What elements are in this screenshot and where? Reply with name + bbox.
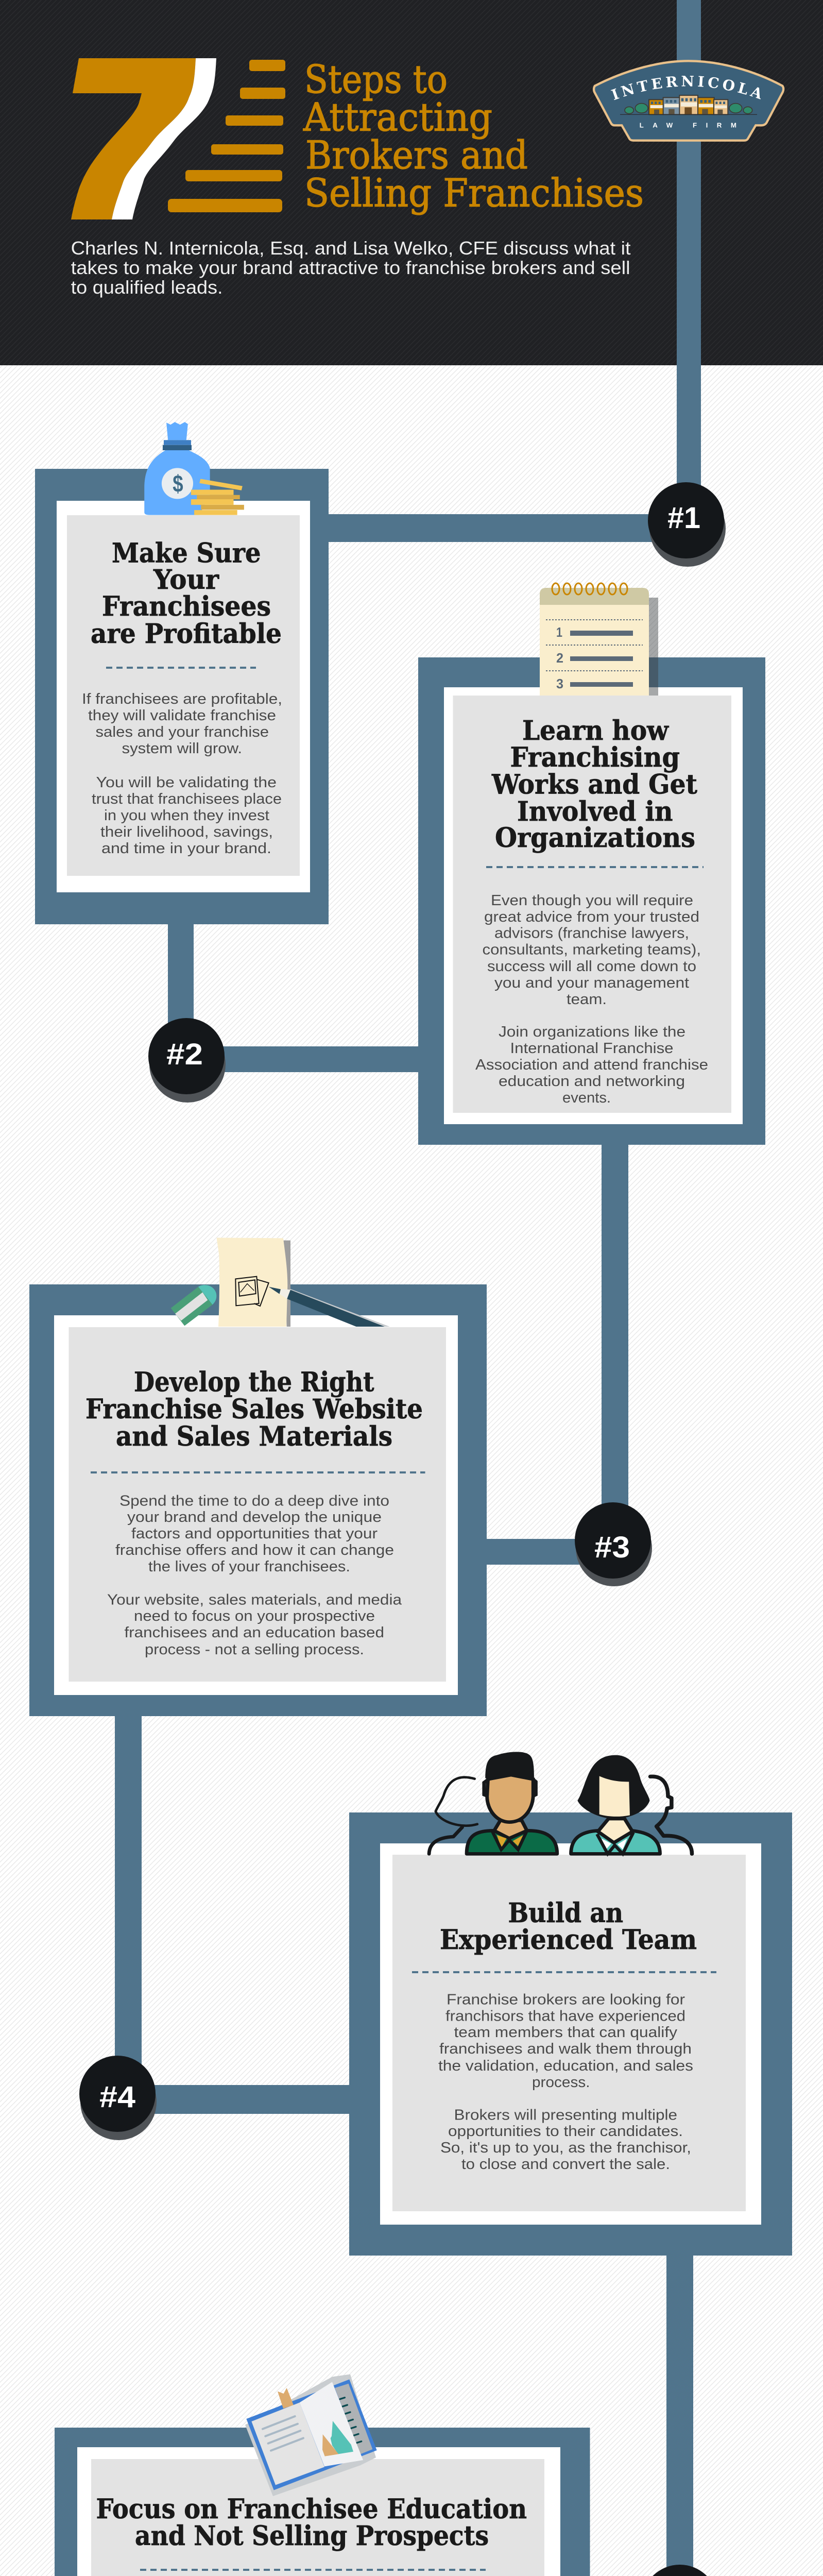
- panel: step 4: [349, 1752, 792, 2256]
- step badge #2: #2: [166, 1038, 203, 1071]
- body text: Franchise brokers are looking for: [447, 1992, 685, 2008]
- header band: [0, 0, 823, 365]
- body text: Spend the time to do a deep dive into: [119, 1493, 389, 1510]
- connector: step 1 to step 2: [168, 922, 422, 1072]
- body text: the validation, education, and sales: [438, 2058, 693, 2074]
- heading: Make Sure: [112, 538, 261, 569]
- title: Attracting: [303, 95, 492, 140]
- body text: education and networking: [499, 1073, 685, 1090]
- body text: in you when they invest: [104, 807, 269, 824]
- body text: process.: [532, 2074, 590, 2091]
- icon: money bag: $: [173, 470, 183, 497]
- heading: Your: [153, 564, 219, 596]
- logo buildings: [649, 95, 728, 114]
- body text: Your website, sales materials, and media: [107, 1592, 402, 1608]
- heading: Focus on Franchisee Education: [96, 2494, 527, 2525]
- body text: trust that franchisees place: [92, 791, 282, 807]
- logo name: INTERNICOLA: [611, 76, 761, 100]
- body text: the lives of your franchisees.: [148, 1558, 350, 1575]
- logo subtitle: LAW FIRM: [640, 122, 736, 129]
- title: Steps to: [304, 57, 448, 102]
- body text: you and your management: [494, 975, 689, 991]
- title: Selling Franchises: [304, 170, 644, 215]
- body text: If franchisees are profitable,: [82, 691, 282, 707]
- body text: You will be validating the: [96, 774, 277, 791]
- icon: sketch paper, pencil and eraser: [171, 1238, 390, 1327]
- heading: [491, 715, 697, 854]
- panel: step 2: [418, 583, 765, 1145]
- step badge #1: [648, 482, 726, 567]
- intro paragraph: to qualified leads.: [71, 277, 223, 298]
- step badge #5: [642, 2565, 719, 2576]
- icon: team of people: [429, 1752, 692, 1854]
- body text: [475, 892, 708, 1106]
- heading: [85, 1366, 423, 1452]
- step badge #4: #4: [99, 2080, 135, 2114]
- heading: and Not Selling Prospects: [135, 2520, 489, 2552]
- icon: numbered notepad: 1: [556, 624, 562, 640]
- body text: Association and attend franchise: [475, 1057, 708, 1073]
- title: Brokers and: [305, 132, 528, 178]
- step badge #3: #3: [594, 1531, 630, 1564]
- body text: to close and convert the sale.: [461, 2156, 670, 2173]
- heading: are Profitable: [91, 618, 282, 650]
- body text: their livelihood, savings,: [100, 824, 273, 840]
- intro paragraph: [71, 238, 631, 298]
- heading: Organizations: [495, 822, 695, 854]
- connector: step 3 to step 4: [115, 1714, 355, 2114]
- heading: Build an: [508, 1897, 623, 1929]
- panel: step 1: [35, 422, 329, 924]
- heading: Experienced Team: [440, 1924, 697, 1956]
- body text: Even though you will require: [491, 892, 693, 909]
- step badge #4: [79, 2056, 157, 2140]
- heading: Develop the Right: [134, 1366, 374, 1398]
- big numeral 7: [71, 58, 216, 219]
- heading: Franchise Sales Website: [85, 1394, 423, 1425]
- body text: factors and opportunities that your: [131, 1526, 378, 1542]
- heading: Franchisees: [102, 591, 271, 622]
- heading: and Sales Materials: [116, 1421, 392, 1452]
- body text: [438, 1992, 693, 2173]
- icon: open book with chart: [245, 2374, 377, 2496]
- heading: [440, 1897, 697, 1956]
- body text: great advice from your trusted: [484, 909, 699, 925]
- step badge #2: [148, 1018, 226, 1103]
- heading: Franchising: [510, 742, 680, 773]
- connector: step 4 to step 5: [587, 2253, 693, 2576]
- connector: header to step 1: [324, 0, 701, 542]
- header logo: [592, 60, 785, 142]
- panel: step 3: [29, 1238, 487, 1716]
- logo badge: [594, 61, 783, 141]
- title: [303, 57, 644, 215]
- heading: [96, 2494, 527, 2552]
- body text: sales and your franchise: [96, 724, 269, 740]
- intro paragraph: takes to make your brand attractive to franchise brokers and sell: [71, 257, 630, 278]
- connector: step 2 to step 3: [484, 1143, 628, 1565]
- body text: International Franchise: [510, 1040, 674, 1057]
- body text: success will all come down to: [487, 958, 696, 975]
- icon: numbered notepad: [540, 583, 658, 696]
- step badge #1: #1: [667, 501, 700, 535]
- icon: money bag: [144, 422, 244, 515]
- logo ground line: [620, 114, 757, 115]
- logo trees: [625, 104, 752, 114]
- heading: [91, 538, 282, 650]
- body text: Join organizations like the: [499, 1024, 685, 1040]
- heading: Works and Get: [491, 769, 697, 801]
- body text: process - not a selling process.: [145, 1641, 364, 1658]
- body text: your brand and develop the unique: [127, 1509, 382, 1526]
- heading: Involved in: [517, 796, 673, 827]
- body text: franchisees and walk them through: [439, 2041, 692, 2057]
- body text: team members that can qualify: [454, 2024, 678, 2041]
- icon: numbered notepad: 3: [556, 676, 563, 691]
- body text: advisors (franchise lawyers,: [494, 925, 689, 942]
- body text: events.: [562, 1090, 611, 1106]
- panel: step 5: [55, 2374, 590, 2576]
- body text: franchisors that have experienced: [445, 2008, 685, 2025]
- body text: and time in your brand.: [101, 840, 271, 857]
- step badge #3: [575, 1502, 652, 1586]
- speed bars beside 7: [168, 60, 285, 212]
- icon: numbered notepad: 2: [556, 650, 563, 666]
- body text: consultants, marketing teams),: [482, 942, 701, 958]
- body text: need to focus on your prospective: [134, 1608, 375, 1624]
- intro paragraph: Charles N. Internicola, Esq. and Lisa Welko, CFE discuss what it: [71, 238, 631, 259]
- body text: they will validate franchise: [88, 707, 276, 724]
- body text: Brokers will presenting multiple: [454, 2107, 677, 2124]
- body text: [82, 691, 282, 857]
- body text: So, it's up to you, as the franchisor,: [440, 2140, 691, 2156]
- heading: Learn how: [522, 715, 669, 747]
- body text: system will grow.: [122, 740, 242, 757]
- body text: team.: [567, 991, 607, 1008]
- body text: [107, 1493, 402, 1658]
- body text: franchisees and an education based: [125, 1624, 384, 1641]
- body text: opportunities to their candidates.: [448, 2123, 683, 2140]
- body text: franchise offers and how it can change: [115, 1542, 394, 1558]
